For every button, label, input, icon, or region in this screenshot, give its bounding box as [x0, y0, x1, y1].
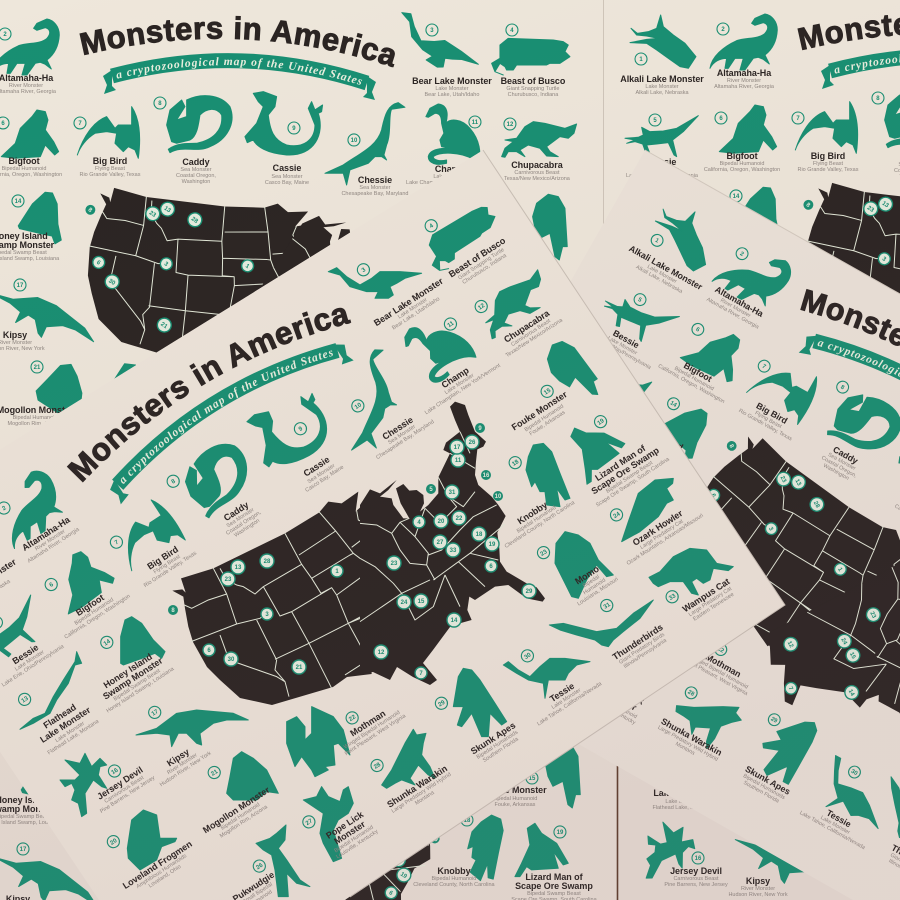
- entry: Loveland Frogmen: Loveland Frogmen: [121, 839, 194, 891]
- entry: Caddy: Coastal Oregon,: [225, 510, 263, 537]
- entry: Bigfoot: Bipedal Humanoid: [74, 597, 115, 627]
- creature silhouettes: [0, 181, 733, 897]
- creature: Mogollon Monster: [227, 752, 278, 800]
- entry: Beast of Busco: 4: [429, 223, 435, 230]
- entry: Champ: Lake Monster: [444, 373, 475, 396]
- creature: Flathead Lake Monster: [20, 652, 82, 729]
- entry: Altamaha-Ha: [0, 474, 81, 565]
- map location markers: 20: [438, 519, 445, 525]
- entry: Caddy: Sea Monster: [226, 507, 255, 529]
- map location markers: 6: [489, 564, 493, 570]
- creature: Bessie: [0, 595, 53, 670]
- entry: Pope Lick Monster: Bipedal Humanoid: [333, 825, 375, 854]
- creature: Big Bird: [105, 496, 186, 574]
- creature: Fouke Monster: [539, 335, 605, 409]
- creatures traced in the lower right of the central poster: [453, 443, 733, 737]
- entry: Wampus Cat: Large Predatory Cat: [688, 586, 733, 618]
- map location markers: 12: [378, 650, 385, 656]
- entry: Champ: Champ: [440, 365, 471, 390]
- entry: Mogollon Monster: Bipedal Humanoid: [220, 802, 261, 832]
- entry: Knobby: 18: [511, 459, 521, 468]
- entry: Knobby: Cleveland County, North Carolina: [504, 499, 577, 550]
- entry: Beast of Busco: Giant Snapping Turtle: [457, 247, 506, 281]
- entry: Chupacabra: [473, 268, 565, 359]
- entry: Beast of Busco: Churubusco, Indiana: [462, 252, 509, 286]
- entry: Shunka Warakin: [363, 729, 456, 820]
- title and labels in poster coordinates: [0, 130, 792, 900]
- map location markers: 33: [450, 548, 457, 554]
- entry: Honey Island Swamp Monster: [72, 614, 176, 714]
- map location markers: 3: [265, 612, 269, 618]
- entry: Big Bird: [108, 504, 198, 592]
- entry: Chupacabra: Texas/New Mexico/Arizona: [505, 317, 565, 359]
- map location markers: 24: [401, 600, 408, 606]
- map location markers: 29: [526, 589, 533, 595]
- entry: Beast of Busco: [418, 191, 514, 290]
- creature: Wampus Cat: [649, 548, 733, 595]
- entry: Pope Lick Monster: 27: [305, 818, 314, 827]
- entry: Fouke Monster: Fouke, Arkansas: [529, 410, 567, 437]
- map location markers: 13: [235, 565, 242, 571]
- entry: Honey Island Swamp Monster: Honey Island Swamp, Louisiana: [106, 666, 176, 714]
- entry: Skunk Apes: [433, 671, 524, 769]
- entry: Big Bird: Big Bird: [145, 544, 180, 572]
- map location markers: 16: [483, 473, 490, 479]
- entry: Pope Lick Monster: Monster: [332, 819, 367, 846]
- creature: Champ: [399, 306, 478, 387]
- entry: Momo: Humanoid: [582, 577, 607, 596]
- poster: lower right: [618, 767, 852, 900]
- map location markers: 6: [207, 648, 211, 654]
- entry: Wampus Cat: [664, 561, 738, 629]
- entry: Lizard Man of Scape Ore Swamp: [556, 396, 671, 509]
- entry: Kipsy: Kipsy: [165, 747, 191, 768]
- entry: Pope Lick Monster: Pope Lick: [324, 809, 366, 841]
- entry: Bigfoot: 6: [49, 582, 55, 589]
- map location markers: 5: [429, 487, 433, 493]
- poster: central, rotated: [0, 152, 784, 900]
- entry: Honey Island Swamp Monster: Swamp Monster: [101, 655, 165, 702]
- entry: Bear Lake Monster: Bear Lake Monster: [372, 276, 445, 328]
- creature: Beast of Busco: [419, 201, 505, 275]
- map location markers: 10: [495, 494, 502, 500]
- entry: Caddy: [165, 445, 266, 554]
- creature: Cassie: [239, 382, 340, 479]
- entry: Big Bird: Flying Beast: [153, 554, 182, 575]
- entry: Fouke Monster: [503, 378, 576, 443]
- entry: Thunderbirds: Giant Predatory Birds: [618, 632, 666, 666]
- map location markers: 30: [228, 657, 235, 663]
- entry: Bigfoot: Bigfoot: [74, 592, 106, 618]
- entry: Ozark Howler: Ozark Mountains, Arkansas/Missouri: [626, 513, 705, 567]
- entry: Cassie: Sea Monster: [307, 463, 336, 485]
- entry: Momo: 23: [540, 549, 549, 558]
- entry: Beast of Busco: Beast of Busco: [447, 235, 508, 279]
- entry: Bear Lake Monster: [343, 232, 452, 338]
- map: eastern states: [360, 402, 545, 685]
- poster: bottom middle: [345, 748, 596, 900]
- entry: Flathead Lake Monster: 13: [21, 696, 30, 705]
- creatures traced in central poster coordinates: [20, 617, 435, 897]
- entry: Honey Island Swamp Monster: Honey Island: [102, 652, 154, 690]
- entry: Chessie: 10: [354, 402, 363, 411]
- creature: Ozark Howler: [622, 478, 673, 542]
- creature: Altamaha-Ha: [0, 465, 72, 550]
- creature: Alkali Lake Monster: [0, 511, 3, 593]
- entry: Alkali Lake Monster: [0, 539, 25, 621]
- entry: Lizard Man of Scape Ore Swamp: Scape Ore Swamp, South Carolina: [595, 456, 671, 509]
- entry: Cassie: Casco Bay, Maine: [304, 464, 345, 494]
- entry: Tessie: Lake Monster: [551, 687, 582, 711]
- creature: Knobby: [526, 443, 570, 507]
- entry: Loveland Frogmen: [97, 801, 200, 900]
- map location markers: 9: [478, 426, 482, 432]
- entry: Loveland Frogmen: Amphibious Humanoids: [136, 853, 188, 890]
- creature: Pope Lick Monster: [303, 787, 353, 862]
- entry: Chupacabra: Carnivorous Beast: [510, 318, 552, 348]
- entry: Mogollon Monster: 21: [210, 769, 220, 778]
- entry: Kipsy: Hudson River, New York: [159, 750, 213, 788]
- entry: Chupacabra: Chupacabra: [502, 308, 552, 345]
- entry: Bear Lake Monster: Bear Lake, Utah/Idaho: [391, 296, 441, 331]
- entry: Shunka Warakin: Large Predatory Wild Hybrid: [391, 772, 452, 815]
- map location markers: 21: [296, 665, 303, 671]
- entry: Wampus Cat: Eastern Tennessee: [692, 592, 735, 623]
- entry: Skunk Apes: Skunk Apes: [469, 720, 517, 756]
- entry: Jersey Devil: Pine Barrens, New Jersey: [99, 775, 156, 815]
- entry: Thunderbirds: Illinois/Pennsylvania: [623, 637, 669, 670]
- entry: Jersey Devil: Carnivorous Beast: [104, 775, 146, 805]
- entry: Pukwudgie: 26: [255, 862, 265, 871]
- creature: Chupacabra: [473, 268, 556, 339]
- entry: Momo: Louisiana, Missouri: [576, 577, 620, 607]
- entry: Bear Lake Monster: 3: [361, 267, 368, 274]
- entry: Caddy: 8: [171, 478, 177, 486]
- entry: Flathead Lake Monster: Flathead Lake, Montana: [47, 718, 101, 756]
- entry: Champ: [389, 308, 502, 416]
- creatures traced in poster coordinates: [0, 181, 650, 812]
- entry: Lizard Man of Scape Ore Swamp: Bipedal Swamp Beast: [605, 460, 654, 495]
- map location markers: [168, 423, 536, 679]
- entry: Lizard Man of Scape Ore Swamp: Scape Ore Swamp: [590, 445, 661, 496]
- entry: Wampus Cat: Wampus Cat: [681, 576, 732, 614]
- entry: Cassie: [273, 415, 345, 494]
- entry: Kipsy: [122, 694, 213, 788]
- entry: Jersey Devil: [83, 749, 156, 815]
- creature: Jersey Devil: [60, 753, 107, 817]
- entry: Skunk Apes: 29: [438, 699, 447, 708]
- entry: Chessie: Chessie: [381, 415, 415, 442]
- map location markers: 18: [476, 532, 483, 538]
- subtitle ribbon: a cryptozoological map of the United States: [120, 350, 333, 484]
- entry: Thunderbirds: Thunderbirds: [611, 622, 665, 662]
- entry: Knobby: [466, 442, 577, 550]
- entry: Altamaha-Ha: 2: [1, 505, 8, 512]
- entry: Tessie: 30: [524, 652, 533, 661]
- entry: Momo: Bipedal: [582, 574, 601, 589]
- entry: Bear Lake Monster: Lake Monster: [397, 297, 429, 320]
- creature: Kipsy: [136, 710, 248, 747]
- entry: Cassie: Cassie: [302, 454, 331, 479]
- entry: Mogollon Monster: Mogollon Monster: [201, 785, 272, 835]
- entry: Champ: Lake Champlain, New York/Vermont: [424, 363, 502, 416]
- entry: Thunderbirds: [584, 581, 671, 672]
- entry: Altamaha-Ha: River Monster: [34, 529, 67, 552]
- entry: Tessie: Lake Tahoe, California/Nevada: [536, 681, 604, 727]
- map location markers: 31: [449, 490, 456, 496]
- map of the United States: [168, 402, 545, 705]
- entry: Chessie: Chesapeake Bay, Maryland: [375, 419, 435, 461]
- map: western states: [172, 492, 395, 705]
- map location markers: 11: [455, 458, 462, 464]
- entry: Bessie: Lake Erie, Ohio/Pennsylvania: [1, 643, 66, 688]
- creature: Honey Island Swamp Monster: [121, 617, 165, 665]
- entry: Ozark Howler: 24: [613, 511, 622, 520]
- poster: back right: [603, 0, 900, 294]
- map location markers: 15: [418, 599, 425, 605]
- entry: Momo: Momo: [573, 563, 601, 586]
- entry: Altamaha-Ha: Altamaha-Ha: [20, 514, 73, 553]
- entry: Pukwudgie: [223, 857, 283, 900]
- poster: back left: [0, 12, 900, 668]
- entry: Pope Lick Monster: Louisville, Kentucky: [335, 829, 380, 860]
- entry: Honey Island Swamp Monster: 14: [103, 639, 112, 648]
- poster: right, rotated: [603, 150, 900, 899]
- entry: Fouke Monster: 15: [543, 387, 553, 397]
- entry: Bessie: Lake Monster: [14, 649, 46, 673]
- entry: Fouke Monster: Fouke Monster: [510, 389, 569, 432]
- creature: Lizard Man of Scape Ore Swamp: [558, 410, 632, 484]
- entry: Loveland Frogmen: Loveland, Ohio: [148, 864, 182, 889]
- entry: Mogollon Monster: [177, 747, 278, 845]
- entry: Mothman: [327, 687, 408, 757]
- entry: Momo: [535, 521, 620, 611]
- map location markers: 8: [171, 608, 175, 614]
- entry: Caddy: Washington: [233, 518, 261, 539]
- map location markers: 23: [391, 561, 398, 567]
- entry: Tessie: Tessie: [548, 681, 576, 704]
- entry: Mothman: Point Pleasant, West Virginia: [344, 713, 408, 757]
- entry: Bessie: [0, 593, 66, 688]
- creature: Thunderbirds: [549, 600, 653, 647]
- entry: Flathead Lake Monster: Lake Monster: [38, 705, 93, 745]
- entry: Jersey Devil: 16: [111, 767, 120, 776]
- creature: Caddy: [175, 435, 262, 520]
- creature: Mothman: [287, 707, 350, 777]
- map location markers: 14: [451, 618, 458, 624]
- entry: Ozark Howler: Large Predatory Cat: [639, 518, 685, 551]
- creature: Loveland Frogmen: [127, 810, 177, 870]
- entry: Big Bird: Rio Grande Valley, Texas: [143, 550, 198, 589]
- creature: Bear Lake Monster: [328, 268, 422, 298]
- map location markers: 23: [225, 577, 232, 583]
- entry: Wampus Cat: 33: [668, 593, 678, 602]
- entry: Kipsy: River Monster: [166, 752, 199, 776]
- entry: Chupacabra: 12: [477, 303, 487, 312]
- entry: Caddy: Caddy: [222, 500, 250, 523]
- map location markers: 27: [437, 540, 444, 546]
- entry: Shunka Warakin: Montana: [414, 789, 436, 807]
- poster edge: central poster outline: [350, 150, 785, 897]
- creatures: right column: [419, 197, 612, 432]
- map location markers: 28: [264, 559, 271, 565]
- creature: Pukwudgie: [256, 825, 310, 897]
- entry: Jersey Devil: Jersey Devil: [95, 765, 145, 802]
- creature: Chessie: [313, 346, 426, 460]
- map location markers: 22: [456, 516, 463, 522]
- entry: Lizard Man of Scape Ore Swamp: 19: [597, 418, 606, 427]
- entry: Flathead Lake Monster: [13, 666, 101, 756]
- entry: Big Bird: 7: [114, 539, 121, 546]
- entry: Lizard Man of Scape Ore Swamp: Lizard Man of: [593, 443, 648, 483]
- map location markers: 4: [417, 520, 421, 526]
- creature: Momo: [555, 532, 613, 598]
- entry: Champ: 11: [447, 320, 456, 329]
- poster edge: dark line: [616, 765, 618, 900]
- entry: Thunderbirds: 31: [603, 602, 612, 611]
- entry: Flathead Lake Monster: Flathead: [42, 702, 78, 731]
- entry: Pope Lick Monster: [300, 788, 380, 866]
- entry: Shunka Warakin: 28: [373, 762, 383, 771]
- poster edge: right poster outline: [645, 150, 900, 294]
- entry: Ozark Howler: [598, 470, 705, 567]
- entry: Bigfoot: California, Oregon, Washington: [64, 594, 132, 641]
- entry: Mothman: Winged Bipedal Humanoid: [343, 710, 401, 751]
- entry: Chessie: Sea Monster: [387, 424, 417, 446]
- entry: Chessie: [344, 371, 435, 461]
- creature: Bigfoot: [43, 543, 118, 615]
- creature: Tessie: [503, 658, 590, 698]
- map location markers: 1: [335, 569, 339, 575]
- entry: Mothman: 22: [348, 714, 358, 723]
- entry: Kipsy: 17: [151, 709, 160, 718]
- entry: Fouke Monster: Bipedal Humanoid: [524, 404, 565, 433]
- entry: Shunka Warakin: Shunka Warakin: [385, 763, 449, 810]
- entry: Bessie: Bessie: [11, 642, 40, 666]
- entry: Bigfoot: [33, 547, 132, 641]
- entry: Loveland Frogmen: 20: [109, 838, 119, 847]
- entry: Tessie: [500, 625, 604, 727]
- entry: Honey Island Swamp Monster: Bipedal Swamp Beast: [113, 668, 162, 703]
- entry: Altamaha-Ha: Altamaha River, Georgia: [27, 526, 81, 565]
- map location markers: 17: [454, 445, 461, 451]
- entry: Mothman: Mothman: [348, 708, 387, 738]
- entry: Knobby: Knobby: [515, 500, 549, 526]
- creatures: left columns: [0, 465, 120, 670]
- entry: Ozark Howler: Ozark Howler: [631, 508, 685, 548]
- creature: Shunka Warakin: [382, 729, 435, 788]
- entry: Knobby: Bipedal Humanoid: [516, 505, 557, 535]
- map location markers: 26: [469, 440, 476, 446]
- entry: Cassie: 9: [298, 426, 305, 433]
- entry: Mogollon Monster: Mogollon Rim, Arizona: [219, 804, 270, 840]
- poster: bottom left: [0, 786, 94, 900]
- entry: Skunk Apes: Bipedal Humanoids: [476, 729, 519, 761]
- map location markers: 7: [419, 671, 423, 677]
- entry: Skunk Apes: Southern Florida: [482, 736, 520, 764]
- entry: Flathead Lake Monster: Lake Monster: [54, 721, 86, 744]
- creature: Skunk Apes: [453, 668, 507, 737]
- creatures: upper rows: [97, 296, 489, 596]
- map location markers: 19: [489, 542, 496, 548]
- title: Monsters in America: [66, 308, 352, 482]
